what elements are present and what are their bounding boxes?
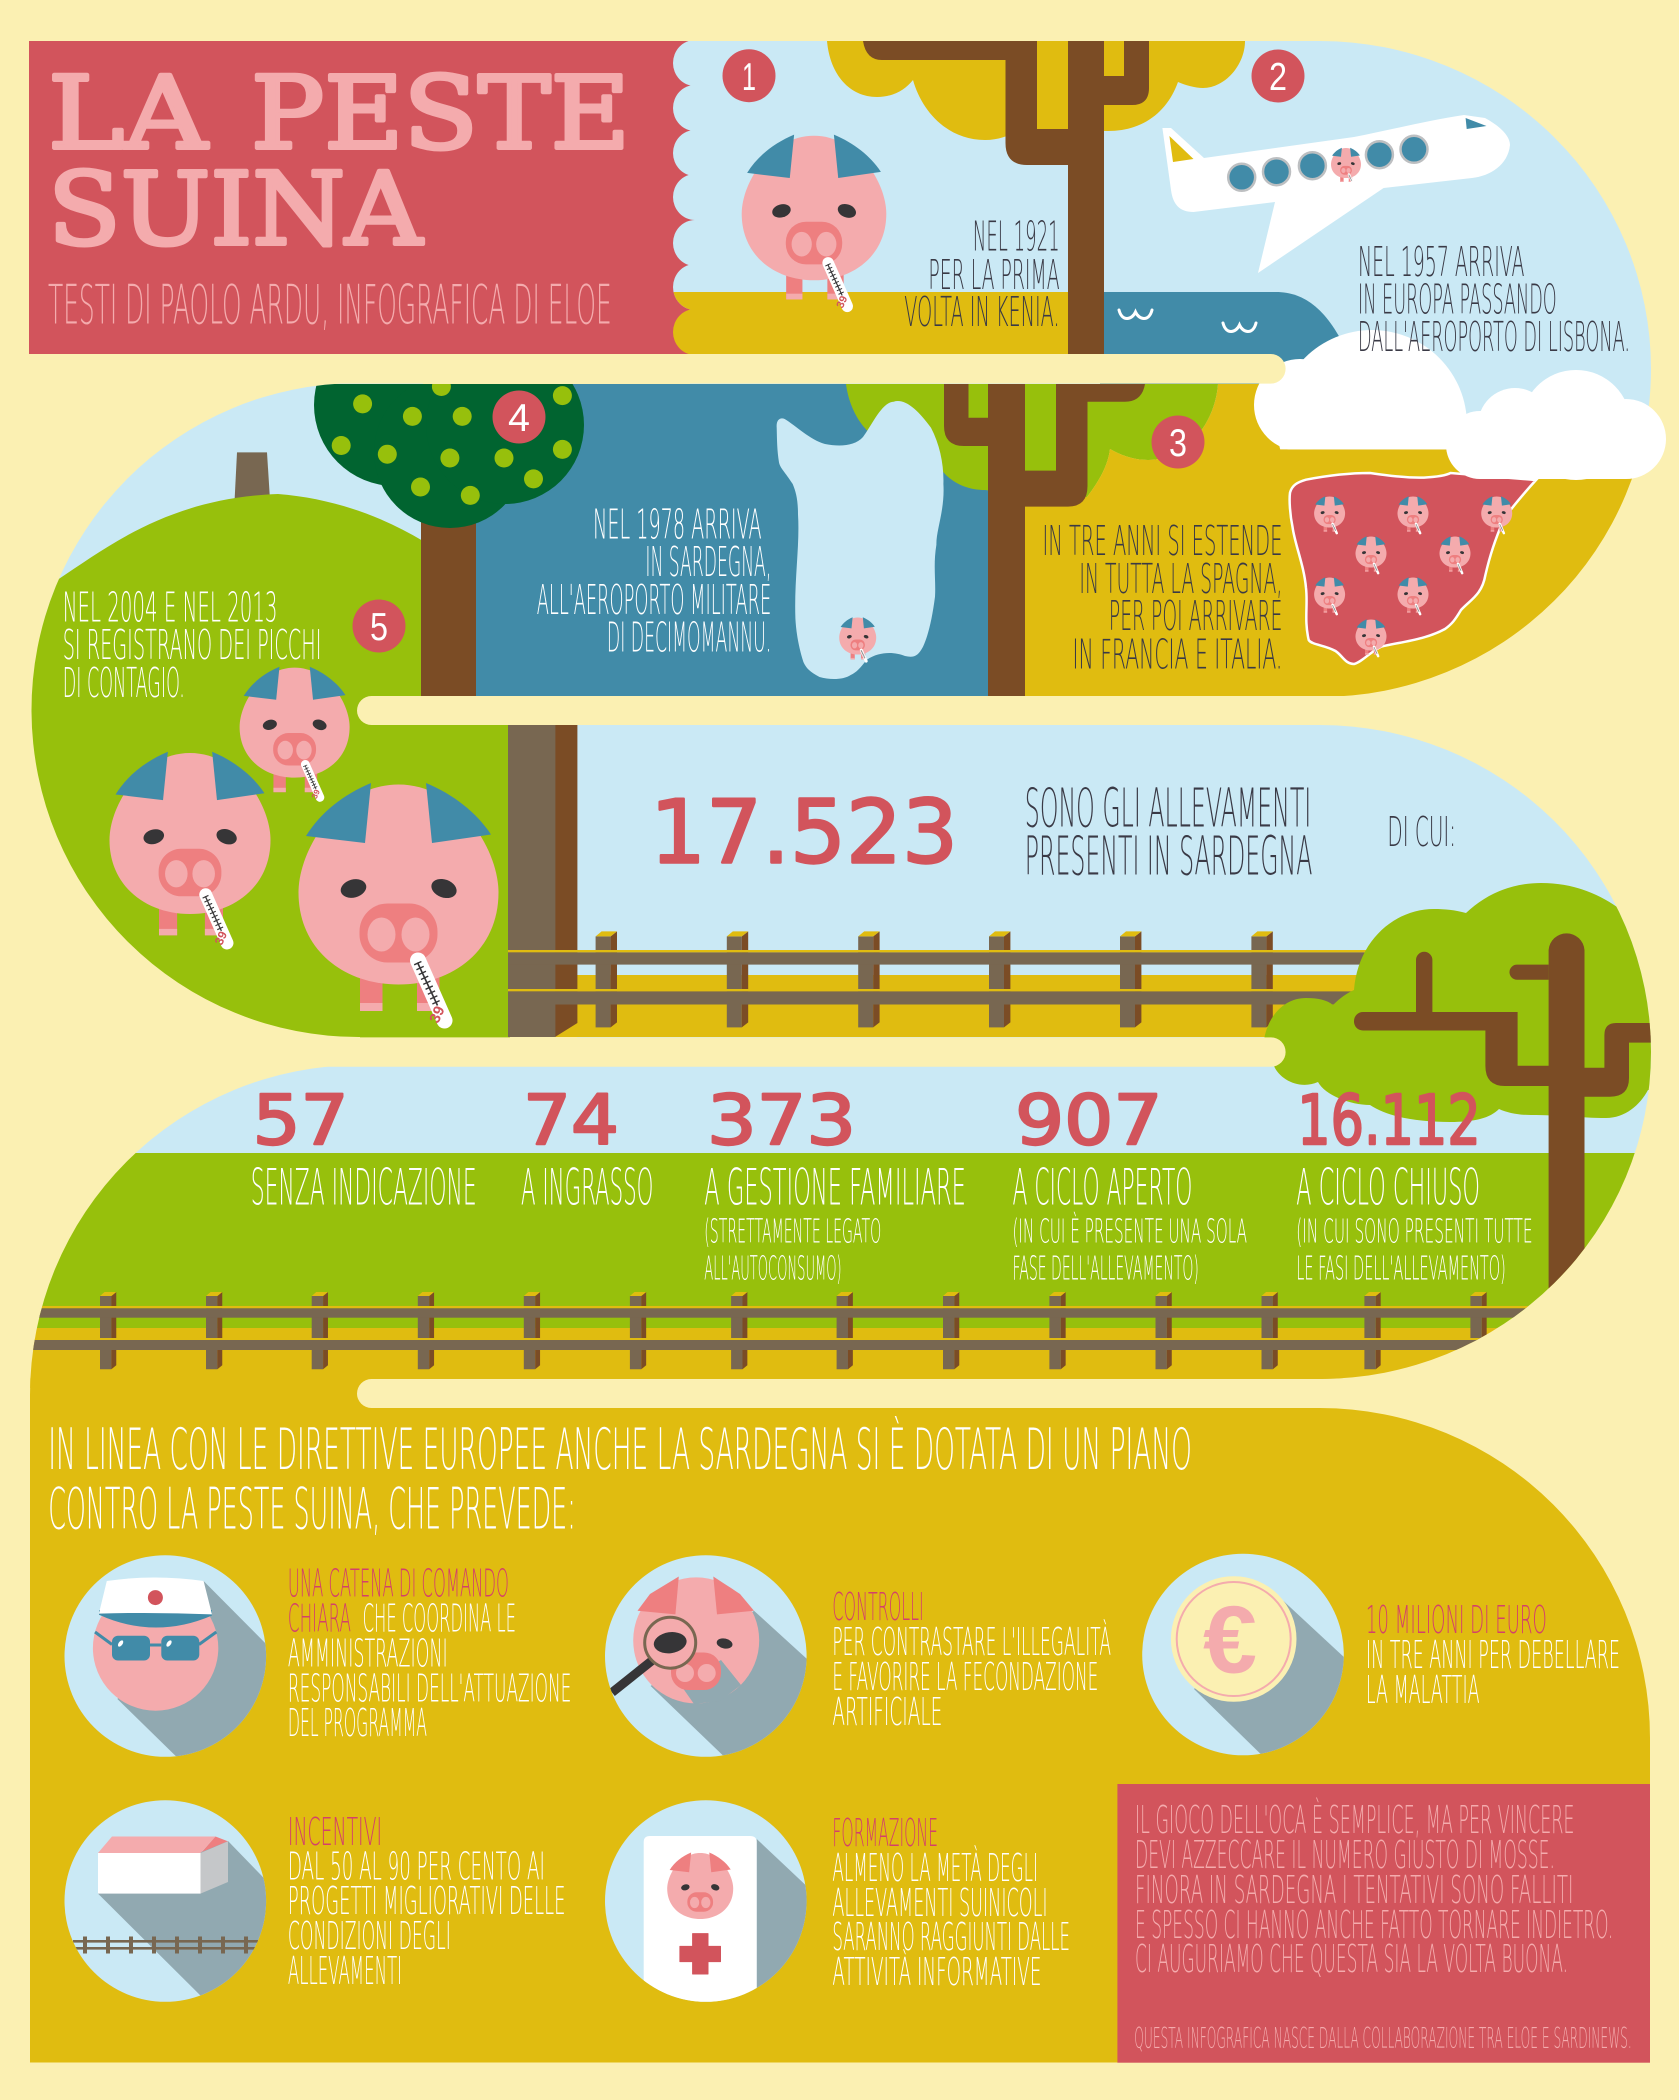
stat: gestione familiare: (STRETTAMENTE LEGATO: [704, 1212, 881, 1251]
stat: a ingrasso: 74: [523, 1081, 619, 1161]
sea: [476, 384, 990, 696]
stat: a ingrasso: [521, 1081, 653, 1216]
big fence post: [508, 725, 577, 1037]
title: PESTE: [251, 55, 630, 172]
icon: small sick pig: 39: [310, 788, 322, 800]
text: step 4: [537, 501, 771, 662]
stat: ciclo aperto: A CICLO APERTO: [1012, 1158, 1192, 1216]
stat: senza indicazione: [251, 1081, 477, 1216]
text: PER LA PRIMA: [928, 251, 1060, 299]
map: Spain: [1290, 473, 1536, 664]
clouds: [1254, 330, 1666, 480]
text: formazione: ATTIVITÀ INFORMATIVE: [832, 1948, 1041, 1995]
stat: ciclo aperto: 907: [1015, 1081, 1162, 1161]
number badge 5: [352, 600, 406, 652]
tree 4 trunk and branches: [1354, 933, 1651, 1288]
text: SONO GLI ALLEVAMENTI: [1025, 777, 1311, 840]
icon: house: [64, 1800, 266, 2002]
text: step 5: [63, 584, 321, 707]
dark green tree crown with fruits: [314, 384, 584, 528]
text: catena di comando: CHE COORDINA LE: [363, 1596, 516, 1642]
text: formazione: ALLEVAMENTI SUINICOLI: [832, 1881, 1048, 1926]
text: controlli: ARTIFICIALE: [832, 1690, 942, 1735]
tree 3 left trunk: [421, 522, 476, 696]
number badge 1: 1: [742, 56, 756, 99]
title panel background: [29, 41, 701, 354]
text: catena di comando: AMMINISTRAZIONI: [288, 1631, 448, 1676]
row 5 background: [20, 1378, 1660, 2070]
text: step 2: [1358, 238, 1630, 361]
stat: ciclo chiuso: [1296, 1081, 1533, 1288]
text: step 1: [904, 213, 1060, 336]
tree 1 crown: [827, 41, 1245, 140]
stat: total farms: [650, 777, 1312, 887]
icon: row 1 pig: [742, 135, 886, 310]
icon: information leaflet: [605, 1800, 807, 2002]
text: A GESTIONE FAMILIARE: [704, 1158, 966, 1216]
icon: big sick pig: 39: [426, 1004, 449, 1026]
row 2 left sky: [20, 380, 423, 620]
waves: [1119, 310, 1256, 332]
text: formazione: [832, 1811, 1070, 1995]
stat: senza indicazione: 57: [253, 1081, 349, 1161]
text: SENZA INDICAZIONE: [251, 1158, 477, 1216]
icon: euro coin: [1142, 1554, 1344, 1756]
row 1 sky: [690, 41, 1660, 441]
tree 2 crown: [846, 384, 1218, 497]
text: TESTI DI PAOLO ARDU, INFOGRAFICA DI ELOE: [48, 272, 612, 336]
text: incentivi: INCENTIVI: [288, 1810, 382, 1855]
stat: gestione familiare: 373: [707, 1081, 856, 1161]
title: [48, 55, 630, 268]
text: NEL 1921: [973, 213, 1060, 261]
text: SI REGISTRANO DEI PICCHI: [63, 621, 321, 669]
icon: row 1 pig: 39: [834, 294, 850, 310]
text: DI DECIMOMANNU.: [607, 614, 771, 662]
row 4 sky: [20, 1060, 1660, 1153]
stat: ciclo aperto: [1012, 1081, 1247, 1288]
tower on the hill: [235, 452, 270, 500]
number badge 2: 2: [1269, 56, 1287, 99]
row 4 fence: [20, 1292, 1660, 1369]
row 3 sky: [577, 725, 1667, 1070]
stat: ciclo chiuso: 16.112: [1297, 1081, 1481, 1161]
hill and meadow: [20, 494, 510, 1040]
cream divider bars: [0, 354, 1286, 384]
text: PER CONTRASTARE L'ILLEGALITÀ: [832, 1618, 1111, 1665]
title: SUINA: [48, 151, 424, 268]
text: IN SARDEGNA,: [645, 538, 771, 586]
row 4 meadow: [20, 1153, 1660, 1328]
icon: small sick pig: [240, 667, 350, 800]
row 3 ground: [555, 975, 1385, 1037]
text: step 3: [1042, 517, 1282, 678]
text: incentivi: ALLEVAMENTI: [288, 1949, 402, 1994]
icon: big sick pig: [298, 783, 498, 1026]
text: PROGETTI MIGLIORATIVI DELLE: [288, 1879, 565, 1924]
text: incentivi: CONDIZIONI DEGLI: [288, 1914, 451, 1959]
text: IN TRE ANNI SI ESTENDE: [1042, 517, 1282, 565]
stat: gestione familiare: [704, 1081, 966, 1288]
number badge 4: [492, 390, 546, 444]
text: VOLTA IN KENIA.: [904, 288, 1060, 336]
text: step 5: NEL 2004 E NEL 2013: [63, 584, 278, 632]
text: catena di comando: [288, 1562, 571, 1746]
icon: pig on Sardinia: [839, 617, 876, 661]
text: controlli: CONTROLLI: [832, 1585, 924, 1630]
yellow field: [1025, 384, 1660, 696]
text: SARANNO RAGGIUNTI DALLE: [832, 1915, 1070, 1960]
icon: medium sick pig: 39: [212, 929, 230, 947]
text: formazione: ALMENO LA METÀ DEGLI: [832, 1844, 1038, 1891]
text: E FAVORIRE LA FECONDAZIONE: [832, 1655, 1098, 1700]
scalloped edge: [673, 41, 701, 310]
icon: commander pig: [64, 1555, 266, 1757]
lake: [1100, 292, 1348, 384]
number badge 5: 5: [370, 606, 388, 649]
stat: gestione familiare: ALL'AUTOCONSUMO): [704, 1249, 842, 1288]
section heading: [48, 1415, 1192, 1542]
text: (IN CUI È PRESENTE UNA SOLA: [1012, 1211, 1247, 1251]
text: IN TUTTA LA SPAGNA,: [1079, 555, 1282, 603]
number badge 1: [722, 49, 776, 102]
text: A INGRASSO: [521, 1158, 653, 1216]
text: 10 milioni: LA MALATTIA: [1366, 1668, 1480, 1713]
text: catena di comando: DEL PROGRAMMA: [288, 1701, 427, 1746]
text: 10 milioni: [1366, 1598, 1620, 1713]
text: step 3: IN FRANCIA E ITALIA.: [1072, 630, 1282, 678]
number badge 3: [1152, 416, 1204, 468]
number badge 4: 4: [508, 397, 530, 440]
tree 1 trunk and branches: [863, 41, 1149, 354]
icon: magnifier on pig: [605, 1555, 807, 1757]
row 4 ground: [30, 1328, 1498, 1388]
number badge 3: 3: [1169, 422, 1187, 465]
title: LA: [48, 55, 209, 172]
text: incentivi: [288, 1810, 565, 1994]
stat: ciclo aperto: FASE DELL'ALLEVAMENTO): [1012, 1249, 1199, 1288]
text: step 5: DI CONTAGIO.: [63, 659, 185, 707]
text: DI CUI:: [1387, 808, 1456, 856]
map: Sardinia: [777, 401, 944, 679]
number badge 2: [1252, 50, 1304, 102]
icon: medium sick pig: [110, 752, 270, 947]
text: ALL'AEROPORTO MILITARE: [537, 576, 771, 624]
icon: euro coin: €: [1203, 1586, 1257, 1694]
panel: closing note: [1117, 1784, 1650, 2063]
text: PER POI ARRIVARE: [1109, 592, 1282, 640]
text: incentivi: DAL 50 AL 90 PER CENTO AI: [288, 1844, 545, 1890]
text: catena di comando: CHIARA: [288, 1596, 351, 1642]
text: PRESENTI IN SARDEGNA: [1025, 824, 1312, 887]
text: NEL 1978 ARRIVA: [593, 501, 762, 549]
tree 4 crown: [1264, 883, 1665, 1122]
closing text: [1135, 1796, 1613, 1982]
icon: plane: [1162, 115, 1510, 273]
section heading: CONTRO LA PESTE SUINA, CHE PREVEDE:: [48, 1476, 576, 1542]
text: formazione: FORMAZIONE: [832, 1811, 938, 1856]
row 3 fence: [508, 931, 1388, 1027]
text: catena di comando: UNA CATENA DI COMANDO: [288, 1562, 509, 1606]
text: controlli: [832, 1585, 1111, 1735]
row 1 ground: [673, 292, 1070, 355]
tree 2 trunk and branches: [944, 384, 1145, 696]
stat: total farms: 17.523: [650, 782, 958, 884]
text: RESPONSABILI DELL'ATTUAZIONE: [288, 1666, 571, 1711]
